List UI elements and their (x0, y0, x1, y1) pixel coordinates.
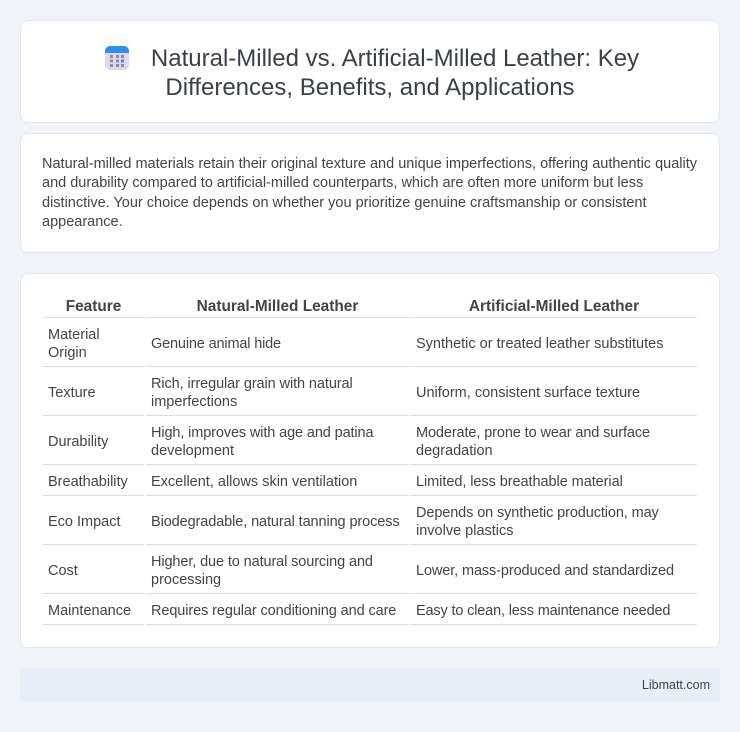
row: material origin: Material (48, 327, 100, 343)
comparison table card (20, 273, 720, 648)
title card (20, 20, 720, 123)
row: maintenance: Requires regular conditioning and care (151, 603, 396, 619)
table header: Natural-Milled Leather (197, 298, 358, 315)
row: maintenance: Easy to clean, less maintenance needed (416, 603, 670, 619)
row: durability: degradation (416, 443, 493, 459)
intro text card (20, 133, 720, 253)
row: texture: Rich, irregular grain with natural (151, 376, 353, 392)
row: material origin: Genuine animal hide (151, 336, 281, 352)
row: eco impact: Eco Impact (48, 514, 121, 530)
row: durability (43, 425, 697, 465)
row: eco impact: Depends on synthetic production, may (416, 505, 659, 521)
row: material origin: Origin (48, 345, 87, 361)
title (151, 45, 639, 100)
row: cost: Cost (48, 563, 78, 579)
row: durability: Durability (48, 434, 108, 450)
row: texture: Uniform, consistent surface texture (416, 385, 640, 401)
row: texture (43, 376, 697, 416)
row: maintenance: Maintenance (48, 603, 131, 619)
intro paragraph: appearance. (42, 214, 123, 230)
title: Differences, Benefits, and Applications (165, 74, 575, 100)
row: durability: High, improves with age and patina (151, 425, 373, 441)
row: breathability: Limited, less breathable material (416, 474, 623, 490)
intro paragraph: distinctive. Your choice depends on whether you prioritize genuine craftsmanship or consistent (42, 195, 647, 211)
row: eco impact (43, 505, 697, 545)
row: material origin: Synthetic or treated leather substitutes (416, 336, 663, 352)
footer bar (20, 668, 720, 702)
icon: calendar (105, 46, 129, 70)
row: material origin (43, 327, 697, 367)
row: cost: Higher, due to natural sourcing and (151, 554, 373, 570)
row: durability: Moderate, prone to wear and surface (416, 425, 650, 441)
footer source text: Libmatt.com (642, 678, 710, 692)
row: texture: imperfections (151, 394, 237, 410)
intro paragraph: Natural-milled materials retain their original texture and unique imperfections, offering authentic quality (42, 156, 697, 172)
row: eco impact: Biodegradable, natural tanning process (151, 514, 400, 530)
intro paragraph: and durability compared to artificial-milled counterparts, which are often more uniform but less (42, 175, 643, 191)
row: cost: processing (151, 572, 221, 588)
row: eco impact: involve plastics (416, 523, 514, 539)
row: breathability: Excellent, allows skin ventilation (151, 474, 357, 490)
table header (43, 298, 697, 318)
title: Natural-Milled vs. Artificial-Milled Leather: Key (151, 45, 639, 72)
row: breathability (43, 474, 697, 496)
row: cost: Lower, mass-produced and standardized (416, 563, 674, 579)
intro paragraph (42, 156, 697, 230)
row: breathability: Breathability (48, 474, 128, 490)
row: durability: development (151, 443, 234, 459)
row: texture: Texture (48, 385, 96, 401)
table header: Artificial-Milled Leather (469, 298, 639, 315)
table header: Feature (66, 298, 121, 315)
